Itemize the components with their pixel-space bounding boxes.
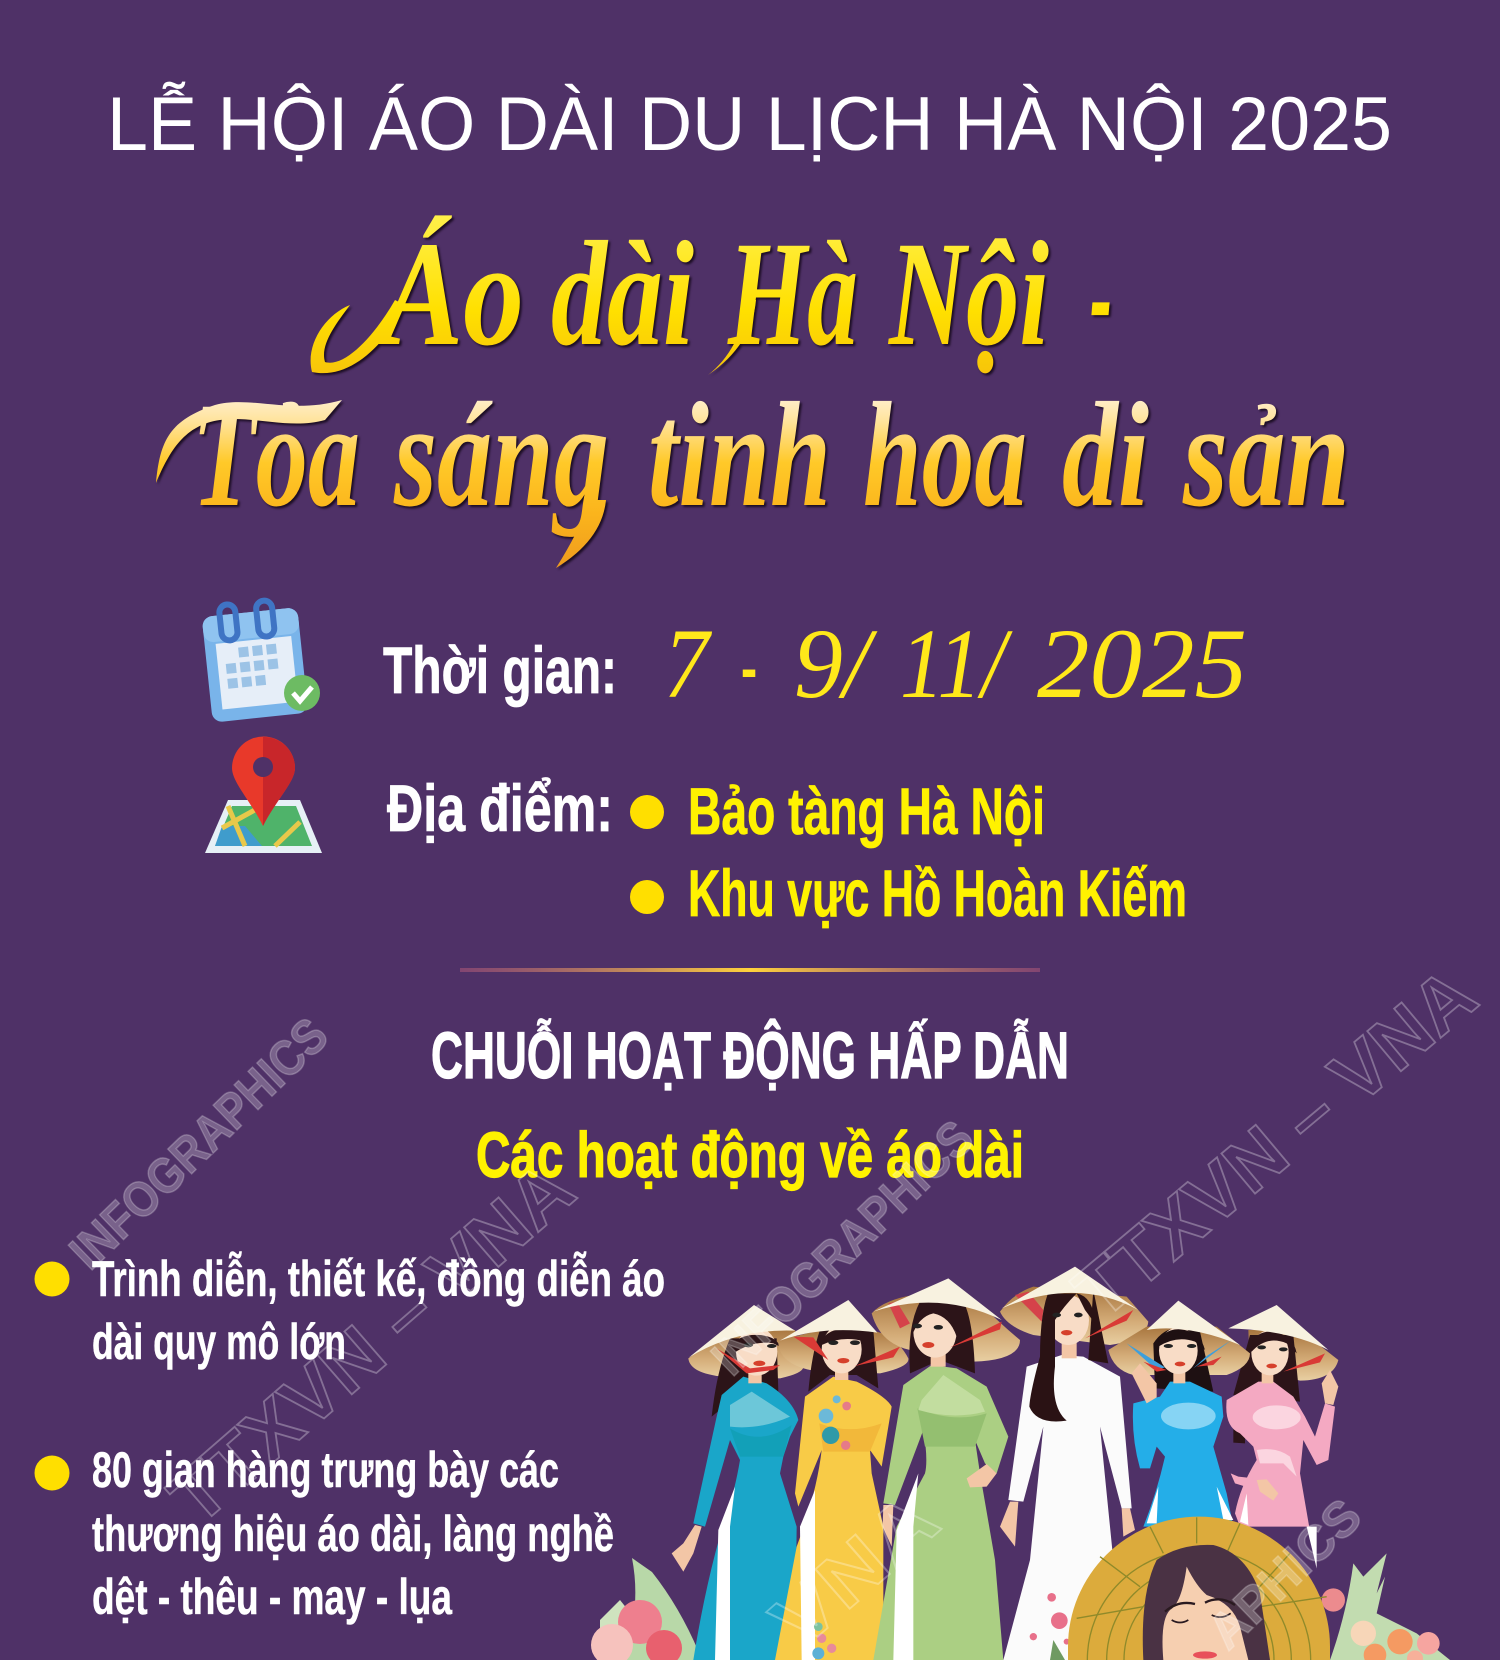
slogan heading: di xyxy=(1062,372,1149,538)
slogan heading: hoa xyxy=(863,372,1027,538)
front girl in conical hat xyxy=(1068,1517,1330,1660)
illustration: women left group xyxy=(672,1278,1020,1660)
location list: Bảo tàng Hà Nội xyxy=(688,774,1045,848)
woman blue xyxy=(672,1305,803,1660)
date: 7 xyxy=(664,608,713,719)
section heading: CHUỖI HOẠT ĐỘNG HẤP DẪN xyxy=(431,1018,1069,1092)
illustration: women right group xyxy=(1000,1267,1450,1660)
icon: calendar xyxy=(201,597,320,723)
watermark: agency: VNA xyxy=(755,1476,955,1660)
section subheading: Các hoạt động về áo dài xyxy=(476,1119,1024,1191)
flowers: left xyxy=(591,1558,702,1660)
woman sky blue xyxy=(1108,1301,1250,1527)
woman white xyxy=(1000,1267,1148,1660)
watermark: agency: TTXVN – VNA xyxy=(153,1145,590,1541)
bullet item 2 xyxy=(34,1442,614,1625)
slogan heading: dài xyxy=(551,211,694,377)
date: - xyxy=(741,608,757,719)
slogan heading: sáng xyxy=(393,372,609,538)
slogan heading: Áo xyxy=(376,211,524,377)
watermark: agency xyxy=(153,952,1492,1660)
woman green xyxy=(872,1278,1020,1660)
slogan heading xyxy=(156,211,1350,568)
bullet list xyxy=(34,1251,665,1625)
label: time: Thời gian: xyxy=(383,633,617,707)
woman yellow xyxy=(775,1300,908,1660)
label: location: Địa điểm: xyxy=(387,771,613,845)
slogan heading: Tỏa xyxy=(192,372,360,538)
date xyxy=(664,608,1247,719)
watermark: infographics: INFOGRAPHICS xyxy=(701,1109,984,1386)
bullet item 1: dài quy mô lớn xyxy=(92,1314,346,1370)
slogan heading: Hà xyxy=(727,211,858,377)
title: LỄ HỘI ÁO DÀI DU LỊCH HÀ NỘI 2025 xyxy=(107,81,1392,167)
slogan heading: tinh xyxy=(648,372,831,538)
location list: Khu vực Hồ Hoàn Kiếm xyxy=(688,856,1187,930)
date: 11/ xyxy=(900,608,1013,719)
slogan heading: Nội xyxy=(888,211,1049,377)
watermark: infographics: INFOGRAPHICS xyxy=(59,1007,339,1280)
slogan heading: sản xyxy=(1182,372,1350,538)
flowers: right xyxy=(1322,1553,1450,1660)
location list xyxy=(630,774,1187,930)
slogan heading: - xyxy=(1090,211,1112,377)
icon: map pin xyxy=(205,737,322,853)
date: 2025 xyxy=(1037,608,1247,719)
bullet item 2: thương hiệu áo dài, làng nghề xyxy=(92,1506,614,1562)
woman pink xyxy=(1226,1305,1338,1570)
bullet item 1 xyxy=(34,1251,665,1370)
watermark: infographics: APHICS xyxy=(1197,1488,1372,1660)
watermark: agency: TTXVN – VNA xyxy=(1058,952,1492,1335)
bullet item 2: 80 gian hàng trưng bày các xyxy=(92,1442,559,1498)
bullet item 1: Trình diễn, thiết kế, đồng diễn áo xyxy=(92,1251,665,1307)
date: 9/ xyxy=(794,608,878,719)
watermark: infographics xyxy=(59,1007,1372,1660)
bullet item 2: dệt - thêu - may - lụa xyxy=(92,1569,453,1625)
